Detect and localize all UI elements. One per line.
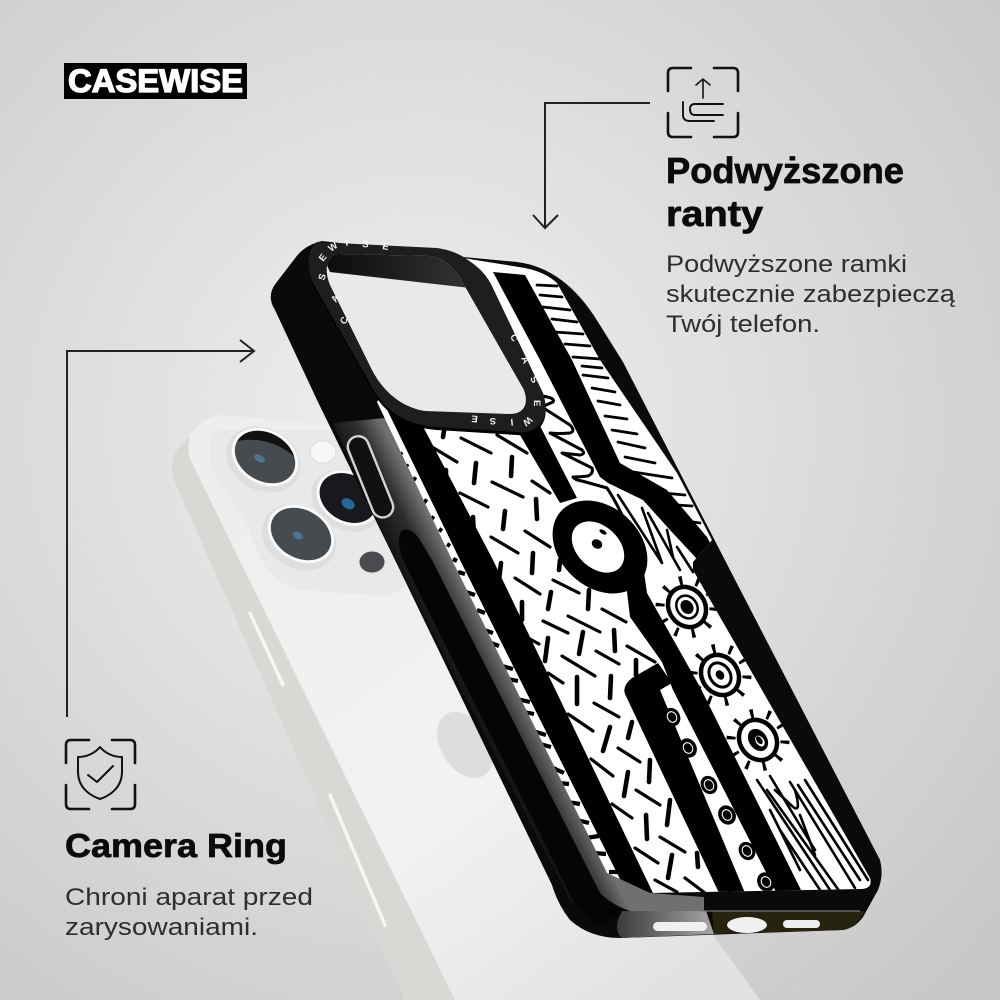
ring face <box>308 242 546 432</box>
short thick dashes <box>443 431 698 878</box>
sun 2 <box>690 644 752 706</box>
sun 3 <box>726 709 790 771</box>
dot highlights <box>665 710 773 889</box>
arrow left <box>67 340 254 717</box>
body line 3: Twój telefon. <box>666 311 820 338</box>
heading: raised edges <box>666 150 904 234</box>
long dashes <box>432 435 705 893</box>
ring aperture <box>327 254 526 414</box>
circle dot <box>592 539 602 549</box>
body line 2: zarysowaniami. <box>65 914 258 941</box>
arrow shaft <box>545 103 650 228</box>
centre band <box>625 565 802 892</box>
circle ring <box>552 500 648 594</box>
body line 1: Podwyższone ramki <box>666 251 907 278</box>
lens 3 <box>250 491 348 584</box>
arrow head <box>533 215 558 228</box>
lens 2 <box>300 457 393 544</box>
ring inner wall <box>327 254 466 288</box>
ring text right: CASEWISE <box>471 333 542 428</box>
icon frame <box>668 68 738 137</box>
sensor <box>359 551 385 573</box>
ring text left: CASEWISE <box>316 238 390 326</box>
bottom translucent edge <box>617 911 714 938</box>
circle fleck <box>599 529 607 535</box>
camera plateau <box>210 430 405 596</box>
white base <box>370 250 890 900</box>
body line 2: skutecznie zabezpieczą <box>666 281 956 308</box>
shield outline <box>78 747 122 799</box>
arrow top <box>533 103 650 228</box>
bottom line bundle <box>757 776 868 892</box>
sun 1 <box>656 576 716 638</box>
dark side channel <box>399 529 630 925</box>
icon arrow <box>696 79 710 98</box>
speaker port left <box>653 922 707 931</box>
phone side band <box>172 436 455 1000</box>
volume button <box>345 433 396 521</box>
icon tray <box>683 102 723 121</box>
arrow shaft <box>67 351 254 717</box>
body line 1: Chroni aparat przed <box>65 884 313 911</box>
case <box>271 241 882 938</box>
white phone <box>172 413 760 1000</box>
zigzag line <box>542 396 622 515</box>
hook band <box>624 663 745 893</box>
left strip dashes <box>400 453 618 872</box>
ring shadow rim <box>308 245 546 435</box>
flash <box>310 441 336 463</box>
usb port <box>727 917 767 933</box>
bottom dark edge <box>712 911 865 934</box>
icon: raised edges <box>668 68 738 137</box>
phone body <box>172 415 760 1000</box>
dot row <box>668 708 774 891</box>
speaker port right <box>783 920 820 928</box>
dots strip <box>666 708 774 891</box>
bottom highlight <box>700 910 860 912</box>
case shell <box>271 241 882 938</box>
text: raised edges <box>666 251 956 338</box>
band to circle <box>520 420 577 503</box>
icon frame <box>66 740 135 809</box>
logo text: CASEWISE <box>68 63 243 99</box>
heading line 2: ranty <box>666 193 763 234</box>
check mark <box>88 766 113 782</box>
arrow head <box>240 340 254 362</box>
lens 1 <box>214 413 313 506</box>
text: camera ring <box>65 884 313 941</box>
logo <box>64 63 247 99</box>
hatch lines strip <box>537 285 700 523</box>
logo box <box>64 63 247 99</box>
left stripe <box>380 395 653 893</box>
circle centre <box>572 521 624 573</box>
upper bent band <box>493 272 710 558</box>
heading line 1: Podwyższone <box>666 150 904 191</box>
icon: shield <box>66 740 135 809</box>
heading: camera ring: Camera Ring <box>65 827 287 864</box>
apple logo <box>426 702 504 788</box>
case pattern <box>370 250 890 900</box>
case translucent side <box>333 418 704 925</box>
side buttons <box>250 613 385 925</box>
camera ring <box>308 238 546 435</box>
fine loop lines <box>618 495 693 572</box>
